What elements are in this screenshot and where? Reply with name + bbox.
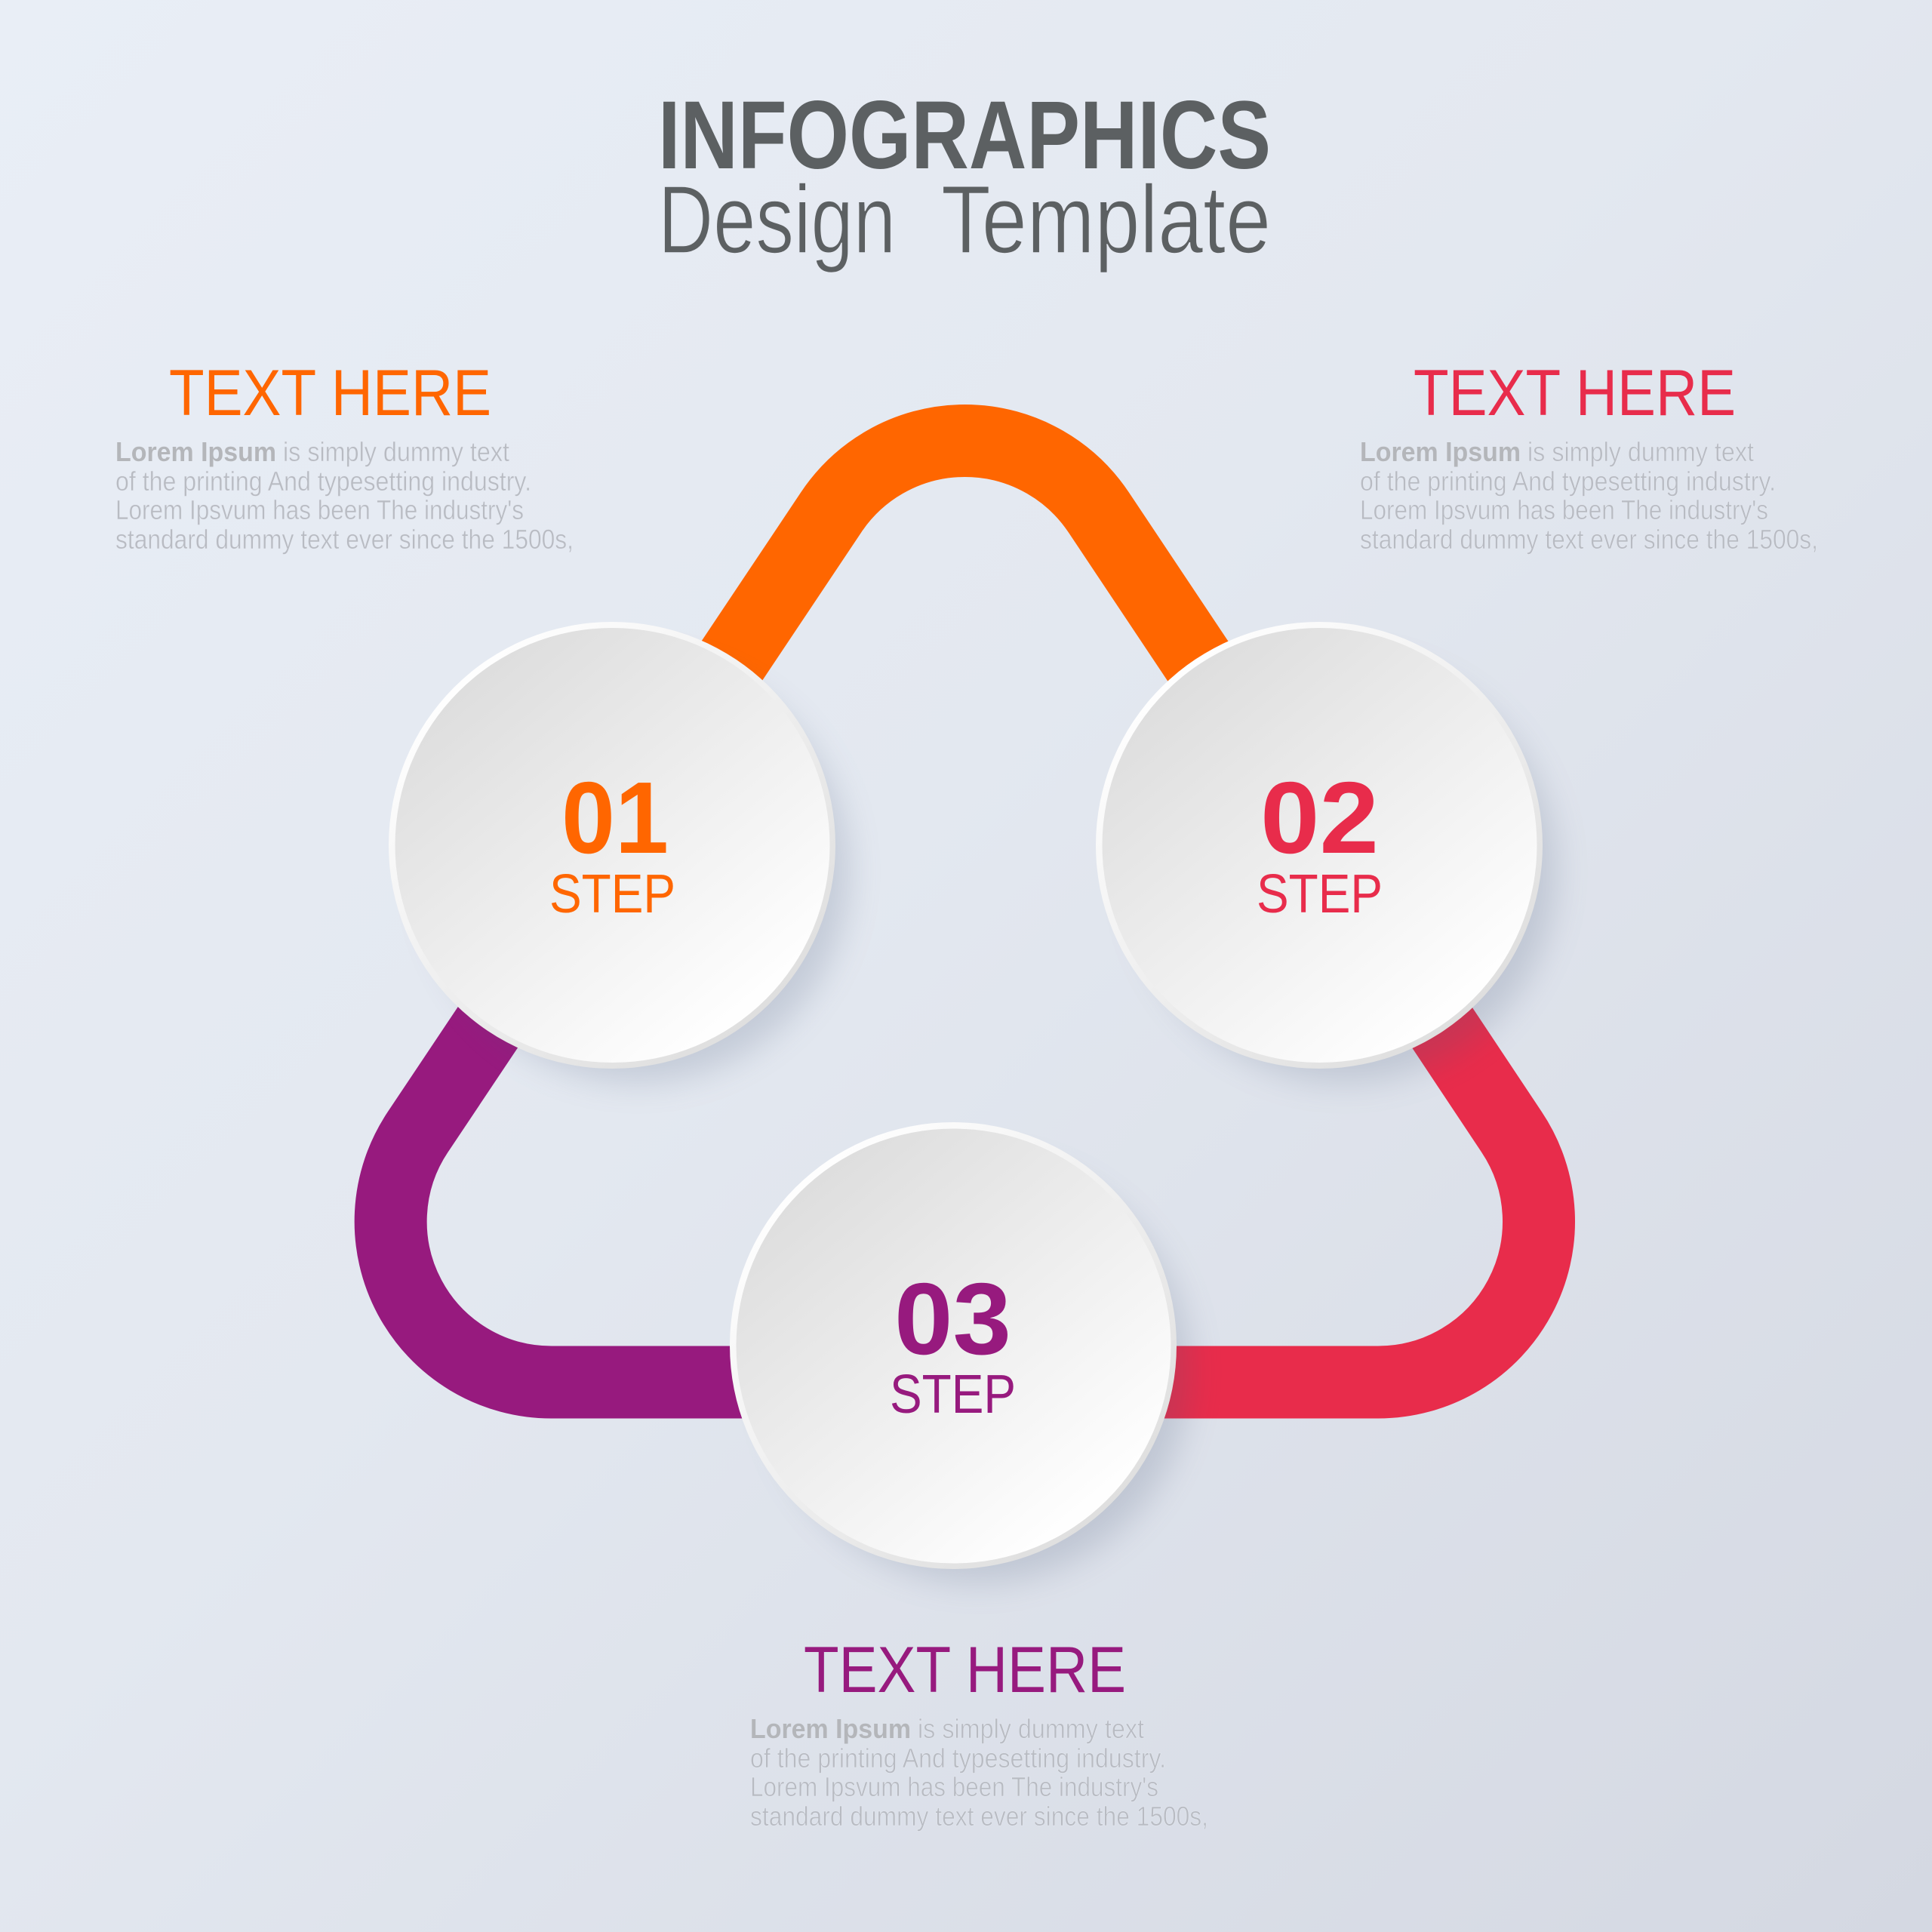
step 2 label: STEP <box>1257 864 1383 924</box>
step 3 number: 03 <box>894 1262 1011 1376</box>
title: INFOGRAPHICS <box>658 82 1271 189</box>
text block: step 2: of the printing And typesetting industry. <box>1360 466 1776 497</box>
circle: step 3 <box>730 1122 1190 1583</box>
step 3 label: STEP <box>890 1364 1016 1425</box>
text block: step 2 <box>1360 357 1818 555</box>
text block: step 3: TEXT HERE <box>804 1634 1126 1706</box>
text block: step 3 <box>750 1634 1208 1832</box>
connector band: red right arc <box>953 981 1539 1383</box>
text block: step 3: Lorem Ipsvum has been The industry's <box>750 1771 1158 1802</box>
title <box>658 82 1271 274</box>
text block: step 3: standard dummy text ever since the 1500s, <box>750 1801 1208 1832</box>
connector band: orange top arc <box>706 441 1224 700</box>
circle: step 1 <box>389 622 849 1082</box>
text block: step 2: TEXT HERE <box>1414 357 1736 429</box>
text block: step 2: Lorem Ipsvum has been The industry's <box>1360 494 1768 525</box>
step 1 number: 01 <box>561 761 669 875</box>
text block: step 1 <box>115 357 574 555</box>
text block: step 1: is simply dummy text <box>283 436 509 467</box>
text block: step 3: is simply dummy text <box>918 1713 1144 1744</box>
text block: step 2: standard dummy text ever since the 1500s, <box>1360 524 1818 555</box>
step 1 label: STEP <box>549 864 675 924</box>
title: Design <box>658 166 896 274</box>
circle: step 2 <box>1096 622 1556 1082</box>
connector band: purple left arc <box>391 978 953 1383</box>
text block: step 1: TEXT HERE <box>169 357 491 429</box>
text block: step 2: is simply dummy text <box>1527 436 1754 467</box>
text block: step 3: of the printing And typesetting industry. <box>750 1743 1166 1774</box>
text block: step 1: of the printing And typesetting industry. <box>115 466 531 497</box>
text block: step 1: standard dummy text ever since the 1500s, <box>115 524 574 555</box>
text block: step 1: Lorem Ipsvum has been The industry's <box>115 494 524 525</box>
text block: step 3: Lorem Ipsum <box>750 1713 911 1744</box>
title: Template <box>941 166 1271 274</box>
step 2 number: 02 <box>1260 761 1379 875</box>
text block: step 1: Lorem Ipsum <box>115 436 276 467</box>
text block: step 2: Lorem Ipsum <box>1360 436 1521 467</box>
